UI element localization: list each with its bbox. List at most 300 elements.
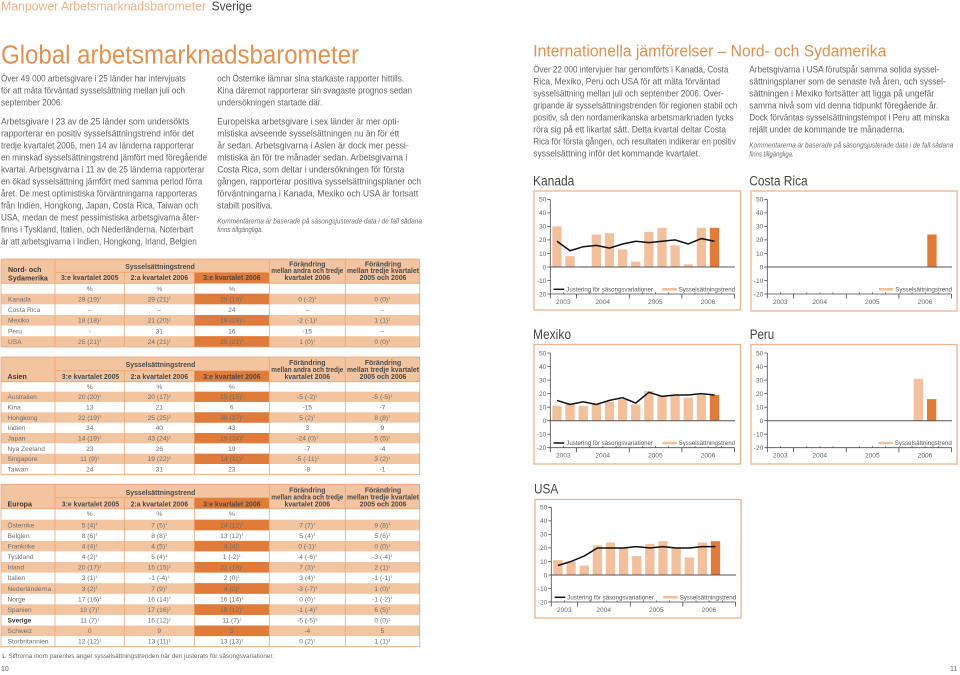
legend xyxy=(554,286,735,294)
text block: left column: en ökad sysselsättning jämfört med samma period förra xyxy=(1,175,203,186)
axes xyxy=(548,507,736,606)
text block: left column: är att arbetsgivarna i Indien, Hongkong, Irland, Belgien xyxy=(1,235,197,246)
text block: right page column 1: positiv, så den nordamerikanska arbetsmarknaden tycks xyxy=(533,112,734,123)
text block: left column: Arbetsgivare i 23 av de 25 länder som undersökts xyxy=(1,115,189,126)
table rows: 31 xyxy=(156,466,163,474)
table rows: Australien xyxy=(8,394,37,401)
table rows: 1 xyxy=(169,638,172,642)
y axis labels: 30 xyxy=(539,224,547,231)
note: seasonal adjustment, left page: Kommentarerna är baserade på säsongsjusterade data i de fall sådana xyxy=(217,216,422,225)
table header: Sysselsättningstrend xyxy=(126,362,195,369)
y axis labels: -20 xyxy=(754,291,764,298)
table rows: 11 (7) xyxy=(222,618,239,624)
table rows: 1 xyxy=(165,553,168,558)
table rows: 43 (24) xyxy=(148,436,169,442)
x axis labels xyxy=(556,453,716,460)
text block: middle column: förväntningarna i Kanada, Mexiko och USA är fortsatt xyxy=(217,187,419,198)
table rows: 1 xyxy=(316,434,319,439)
legend: Sysselsättningstrend xyxy=(680,594,736,602)
table rows: 4 (2) xyxy=(82,554,95,561)
chart: Costa Rica xyxy=(751,191,957,311)
table header: 3:e kvartalet 2005 xyxy=(62,374,119,381)
table rows: 1 xyxy=(169,434,172,439)
table rows: 4 (5) xyxy=(151,544,165,550)
page number right: 11 xyxy=(950,666,957,673)
table rows: 1 xyxy=(317,455,320,460)
text block: left column: september 2006. xyxy=(1,97,63,108)
table rows: 1 xyxy=(95,521,98,526)
table rows: 24 xyxy=(228,307,236,314)
table rows: 1 xyxy=(390,595,393,600)
table rows: 13 (12) xyxy=(220,533,241,540)
page header: Sverige xyxy=(212,0,252,14)
table rows: % xyxy=(229,384,235,391)
table rows: 16 xyxy=(228,328,236,335)
table rows: 0 (2) xyxy=(299,639,313,646)
table rows: Sverige xyxy=(8,618,32,624)
table rows: 1 xyxy=(315,553,318,558)
table rows: - xyxy=(89,328,91,335)
table rows: 29 (19) xyxy=(220,296,241,303)
note: seasonal adjustment, left page: finns tillgängliga. xyxy=(217,225,263,234)
text block: left column: en minskad sysselsättningstrend jämfört med föregående xyxy=(1,151,207,162)
y axis labels: 20 xyxy=(756,237,764,244)
line: Justering för säsongsvariationer xyxy=(557,392,715,404)
table rows: -1 (-1) xyxy=(372,575,390,582)
table rows: 14 (11) xyxy=(220,456,241,463)
table header: 2005 och 2006 xyxy=(360,275,407,282)
table: Asien xyxy=(1,357,420,474)
table rows: 1 xyxy=(241,316,244,322)
table rows: 1 xyxy=(313,563,316,568)
table header xyxy=(8,261,420,282)
text block: left column: rapporterar en positiv sysselsättningstrend inför det xyxy=(1,127,194,138)
table rows: -4 xyxy=(379,446,386,453)
table rows: -1 (-4) xyxy=(149,575,167,582)
table rows: 1 xyxy=(241,521,244,526)
line: Justering för säsongsvariationer xyxy=(557,239,715,251)
x axis labels: 2004 xyxy=(812,453,827,460)
table rows: 1 xyxy=(165,542,168,547)
chart heading: Mexiko: Mexiko xyxy=(533,327,571,342)
table rows: 18 (18) xyxy=(78,318,99,325)
table header: Förändring xyxy=(365,360,401,367)
table rows: 1 (1) xyxy=(374,639,388,646)
chart heading: Peru: Peru xyxy=(750,327,774,342)
table rows: Nederländerna xyxy=(8,586,51,593)
table rows: 7 (9) xyxy=(151,586,165,593)
table rows: 8 (8) xyxy=(374,415,388,422)
y axis labels: 0 xyxy=(760,418,764,425)
note: seasonal adjustment, right page xyxy=(749,140,953,158)
table rows: Mexiko xyxy=(8,318,29,325)
chart: Mexiko xyxy=(534,344,740,464)
table rows: 1 xyxy=(388,616,391,621)
text block: right page column 1: Rica, Mexiko, Peru och USA för att mäta förväntad xyxy=(533,76,720,87)
table rows: 4 (4) xyxy=(82,544,95,550)
table rows: 0 (-2) xyxy=(298,296,314,303)
legend: Sysselsättningstrend xyxy=(895,286,952,294)
table rows: 1 xyxy=(315,606,318,611)
y axis labels: 10 xyxy=(756,405,764,412)
table rows: 12 (12) xyxy=(78,639,99,646)
table rows: 1 xyxy=(313,338,316,343)
table rows: Norge xyxy=(8,596,26,603)
table: Europa xyxy=(1,484,420,647)
table header: Sysselsättningstrend xyxy=(126,490,195,497)
table rows: 3 xyxy=(305,425,309,432)
table rows: 5 xyxy=(381,628,385,635)
table rows: 1 xyxy=(165,585,168,590)
table header: mellan tredje kvartalet xyxy=(347,268,420,275)
table rows: 1 xyxy=(239,616,242,621)
text block: left column: Över 49 000 arbetsgivare i 25 länder har intervjuats xyxy=(1,73,186,84)
x axis labels: 2005 xyxy=(649,607,664,614)
legend: Sysselsättningstrend xyxy=(679,440,735,447)
footnote: 1. Siffrorna inom parentes anger sysselsättningstrenden när den justerats för säsongsvariationer. xyxy=(1,653,274,660)
x axis labels: 2006 xyxy=(702,607,717,614)
table rows: 3 (1) xyxy=(82,575,95,582)
table rows: – xyxy=(381,307,385,314)
text block: left column: för att mäta förväntad sysselsättning mellan juli och xyxy=(1,85,185,96)
table rows: 1 (1) xyxy=(374,318,388,325)
table rows: 13 xyxy=(86,404,94,412)
table rows: 0 (-1) xyxy=(298,544,314,550)
table rows: 25 (21) xyxy=(220,339,241,346)
y axis labels: 40 xyxy=(756,364,764,371)
table header: 3:e kvartalet 2005 xyxy=(61,275,119,282)
table rows: 0 (0) xyxy=(374,296,388,303)
note: seasonal adjustment, left page xyxy=(217,216,422,234)
table header: Nord- och xyxy=(8,266,42,274)
table rows: 1 xyxy=(169,295,172,300)
text block: left column: från Indien, Hongkong, Japan, Costa Rica, Taiwan och xyxy=(1,199,198,210)
table rows: 5 (5) xyxy=(374,436,388,442)
chart: USA xyxy=(535,500,741,618)
table rows: 9 (8) xyxy=(374,522,388,529)
y axis labels: -10 xyxy=(538,586,548,593)
table rows: 5 xyxy=(230,628,234,635)
table rows: 3 (4) xyxy=(299,575,313,582)
table rows: 1 xyxy=(167,574,170,579)
table rows: 20 (20) xyxy=(78,394,99,401)
y axis labels: 30 xyxy=(756,224,764,231)
table rows: 26 xyxy=(156,446,163,453)
table header: Asien xyxy=(8,373,27,381)
x axis labels: 2006 xyxy=(918,299,933,306)
table rows: – xyxy=(381,328,385,335)
line: Justering för säsongsvariationer xyxy=(558,547,716,566)
x axis labels: 2005 xyxy=(865,299,880,306)
legend xyxy=(554,440,735,447)
table rows: 1 xyxy=(315,316,318,322)
table rows: 13 (11) xyxy=(148,639,169,646)
table rows: 1 xyxy=(390,553,393,558)
table header: Förändring xyxy=(365,261,401,268)
chart: Kanada xyxy=(534,191,740,310)
table rows: 19 xyxy=(228,446,236,453)
table rows: 14 (19) xyxy=(78,436,99,442)
table rows: 1 xyxy=(169,455,172,460)
table rows: 11 (7) xyxy=(80,618,97,624)
table rows: -8 xyxy=(304,466,311,474)
table rows: 2 (1) xyxy=(374,565,388,572)
text block: right page column 1: sysselsättning mellan juli och september 2006. Över- xyxy=(533,88,724,99)
table rows: 1 xyxy=(241,295,244,300)
table rows: 1 xyxy=(241,638,244,642)
text block: left column: kvartal. Arbetsgivarna i 11 av de 25 länderna rapporterar xyxy=(1,163,205,174)
table header: mellan tredje kvartalet xyxy=(347,495,420,502)
text block: left column: finns i Tyskland, Italien, och Nederländerna. Noterbart xyxy=(1,223,194,234)
chart heading: Kanada: Kanada xyxy=(533,173,575,188)
table rows: 34 xyxy=(86,425,94,432)
table rows xyxy=(8,286,391,346)
y axis labels: 20 xyxy=(756,391,764,398)
legend: Justering för säsongsvariationer xyxy=(566,286,654,294)
axes xyxy=(764,353,952,452)
table rows: % xyxy=(229,511,235,518)
table rows: 5 (4) xyxy=(82,522,95,529)
table rows: 1 xyxy=(95,574,98,579)
table rows: 24 xyxy=(86,466,94,474)
table rows: Schweiz xyxy=(8,628,32,635)
x axis labels: 2004 xyxy=(595,299,610,306)
table rows: Singapore xyxy=(8,456,38,463)
table rows: 7 (5) xyxy=(151,522,165,529)
x axis labels xyxy=(557,607,717,614)
table rows: 1 xyxy=(388,434,391,439)
table rows: 5 (4) xyxy=(151,554,165,561)
y axis labels: -20 xyxy=(754,445,764,452)
table rows: 16 (14) xyxy=(220,596,241,603)
table rows: 1 xyxy=(97,455,100,460)
table rows: Tyskland xyxy=(8,554,34,561)
table rows: 1 xyxy=(99,434,102,439)
table rows: 1 xyxy=(165,532,168,537)
table rows: – xyxy=(88,307,92,314)
table header: 2005 och 2006 xyxy=(360,374,407,381)
table rows xyxy=(8,384,393,474)
table rows: Taiwan xyxy=(8,466,28,474)
table rows: 5 (4) xyxy=(299,533,313,540)
table rows: 23 xyxy=(86,446,94,453)
table rows: 1 xyxy=(241,595,244,600)
table rows: 1 xyxy=(388,638,391,642)
table rows: 16 (12) xyxy=(220,607,241,614)
table rows: 40 xyxy=(156,425,163,432)
table rows: 1 xyxy=(169,316,172,322)
table rows: -1 (-2) xyxy=(372,596,390,603)
table rows: 1 xyxy=(388,532,391,537)
table rows: 1 xyxy=(313,414,316,419)
table rows: 1 xyxy=(241,338,244,343)
table rows: 17 (16) xyxy=(148,607,169,614)
table rows: 20 (17) xyxy=(148,394,169,401)
y axis labels: 40 xyxy=(540,518,548,525)
text block: middle column: och Österrike lämnar sina starkaste rapporter hittills. xyxy=(217,73,404,84)
table rows: 1 xyxy=(99,638,102,642)
table rows: 0 xyxy=(88,628,92,635)
table rows: 1 xyxy=(97,616,100,621)
table rows: USA xyxy=(8,339,22,346)
table rows: 5 (2) xyxy=(299,415,313,422)
table header: 2:a kvartalet 2006 xyxy=(131,502,188,509)
y axis labels: 0 xyxy=(760,264,764,271)
table rows: 4 (2) xyxy=(224,586,238,593)
table rows: 21 xyxy=(156,404,163,412)
x axis labels: 2003 xyxy=(773,299,788,306)
page header: Manpower Arbetsmarknadsbarometer xyxy=(1,0,206,14)
table rows: Japan xyxy=(8,436,26,442)
y axis labels: 40 xyxy=(756,210,764,217)
axes xyxy=(764,199,952,298)
table rows: -1 xyxy=(379,466,386,474)
table rows: 1 xyxy=(390,574,393,579)
text block: right page column 1: Rica för första gången, och resultaten indikerar en positiv xyxy=(533,136,736,147)
axes xyxy=(547,199,735,298)
table rows: – xyxy=(305,307,309,314)
table rows: 1 xyxy=(313,638,316,642)
y axis labels: 50 xyxy=(539,350,547,357)
table rows: 1 xyxy=(95,553,98,558)
y axis labels: 0 xyxy=(543,264,547,271)
table rows: 21 (20) xyxy=(148,318,169,325)
table rows: -5 (-11) xyxy=(295,456,317,463)
table rows: 1 xyxy=(388,455,391,460)
table rows: 1 xyxy=(241,434,244,439)
table rows: 19 (22) xyxy=(148,456,169,463)
table rows: Nya Zeeland xyxy=(8,446,45,453)
x axis labels: 2005 xyxy=(865,453,880,460)
text block: middle column xyxy=(217,73,421,210)
table rows: Österrike xyxy=(8,521,35,529)
table rows: 1 xyxy=(99,563,102,568)
title: Global arbetsmarknadsbarometer xyxy=(1,41,359,69)
table header xyxy=(8,360,420,381)
text block: right page column 2: Arbetsgivarna i USA förutspår samma solida syssel- xyxy=(749,64,939,75)
text block: right page column 2: sättningen i Mexiko fortsätter att ligga på ungefär xyxy=(749,88,934,99)
table rows: 2 (0) xyxy=(224,575,238,582)
y axis labels: 20 xyxy=(539,391,547,398)
table rows: 1 (-2) xyxy=(223,554,239,561)
bars: Sysselsättningstrend xyxy=(553,541,720,575)
table rows: 9 xyxy=(381,425,385,432)
table rows: Indien xyxy=(8,425,26,432)
table rows xyxy=(8,511,393,646)
text block: right page column 1: Över 22 000 intervjuer har genomförts i Kanada, Costa xyxy=(533,64,729,75)
x axis labels: 2006 xyxy=(918,453,933,460)
table rows: 20 (17) xyxy=(78,565,99,572)
table rows: 1 xyxy=(313,574,316,579)
table rows: 1 xyxy=(239,553,242,558)
table rows: 4 (4) xyxy=(224,544,238,550)
x axis labels: 2004 xyxy=(596,607,611,614)
table rows: 19 (24) xyxy=(220,436,241,442)
table header: 3:e kvartalet 2005 xyxy=(62,502,119,509)
table rows: 16 (12) xyxy=(148,618,169,624)
table rows: 1 xyxy=(238,585,241,590)
x axis labels: 2006 xyxy=(701,299,716,306)
table rows: 1 xyxy=(169,393,172,398)
y axis labels xyxy=(538,505,548,606)
table rows: Italien xyxy=(8,575,25,582)
table rows: 1 xyxy=(95,532,98,537)
y axis labels: 40 xyxy=(539,210,547,217)
legend: Sysselsättningstrend xyxy=(895,440,952,447)
table rows: Kina xyxy=(8,404,21,412)
text block: middle column: mistiska avseende sysselsättningen nu än för ett xyxy=(217,127,400,138)
table rows: 1 xyxy=(169,563,172,568)
table rows: % xyxy=(87,384,93,391)
note: seasonal adjustment, right page: finns tillgängliga. xyxy=(749,149,794,158)
table rows: 24 (21) xyxy=(148,339,169,346)
table rows: 1 xyxy=(169,595,172,600)
legend: Justering för säsongsvariationer xyxy=(566,440,654,447)
table header: Europa xyxy=(8,501,32,509)
table rows: 10 (7) xyxy=(80,607,97,614)
y axis labels: 30 xyxy=(539,377,547,384)
table rows: 1 xyxy=(95,542,98,547)
table rows: 0 (0) xyxy=(374,339,388,346)
table rows: 1 xyxy=(99,393,102,398)
chart heading: USA: USA xyxy=(534,481,558,496)
table header: Förändring xyxy=(289,488,325,495)
table rows: 11 (9) xyxy=(80,456,97,463)
table rows: 1 xyxy=(241,455,244,460)
table rows: 1 xyxy=(99,338,102,343)
table rows: 1 xyxy=(241,393,244,398)
y axis labels: 50 xyxy=(540,505,548,512)
x axis labels: 2003 xyxy=(773,453,788,460)
table rows: -7 xyxy=(304,446,311,453)
table header: 3:e kvartalet 2006 xyxy=(203,502,261,509)
y axis labels: 30 xyxy=(756,377,764,384)
table rows: 1 xyxy=(388,542,391,547)
table rows: 1 xyxy=(313,521,316,526)
table header: 2:a kvartalet 2006 xyxy=(131,374,188,381)
table rows: 0 (0) xyxy=(374,544,388,550)
table rows: % xyxy=(229,286,235,293)
axes xyxy=(547,353,735,452)
bars: Sysselsättningstrend xyxy=(914,379,936,421)
y axis labels: 50 xyxy=(756,350,764,357)
table header: mellan andra och tredje xyxy=(271,495,343,502)
table rows: 25 (21) xyxy=(78,339,99,346)
y axis labels: 50 xyxy=(539,197,547,204)
table rows: -15 xyxy=(302,404,312,412)
y axis labels: 40 xyxy=(539,364,547,371)
table header: kvartalet 2006 xyxy=(285,502,330,509)
text block: right page column 2 xyxy=(749,64,950,135)
x axis labels xyxy=(556,299,716,306)
table rows: 3 (2) xyxy=(82,586,95,593)
table rows: 5 (6) xyxy=(374,533,388,540)
table rows: 1 xyxy=(241,532,244,537)
chart heading: Costa Rica: Costa Rica xyxy=(749,173,808,188)
x axis labels xyxy=(773,453,933,460)
table rows: Hongkong xyxy=(8,415,38,422)
table rows: % xyxy=(156,511,162,518)
table rows: 0 (0) xyxy=(299,596,313,603)
heading: Internationella jämförelser: Internationella jämförelser – Nord- och Sydamerika xyxy=(533,42,887,61)
table rows: 1 xyxy=(169,606,172,611)
table rows: 22 (18) xyxy=(220,565,241,572)
y axis labels xyxy=(754,350,764,452)
table rows: 17 (16) xyxy=(78,596,99,603)
table rows: Peru xyxy=(8,328,22,335)
table rows: 1 xyxy=(169,338,172,343)
table rows: 1 xyxy=(169,414,172,419)
